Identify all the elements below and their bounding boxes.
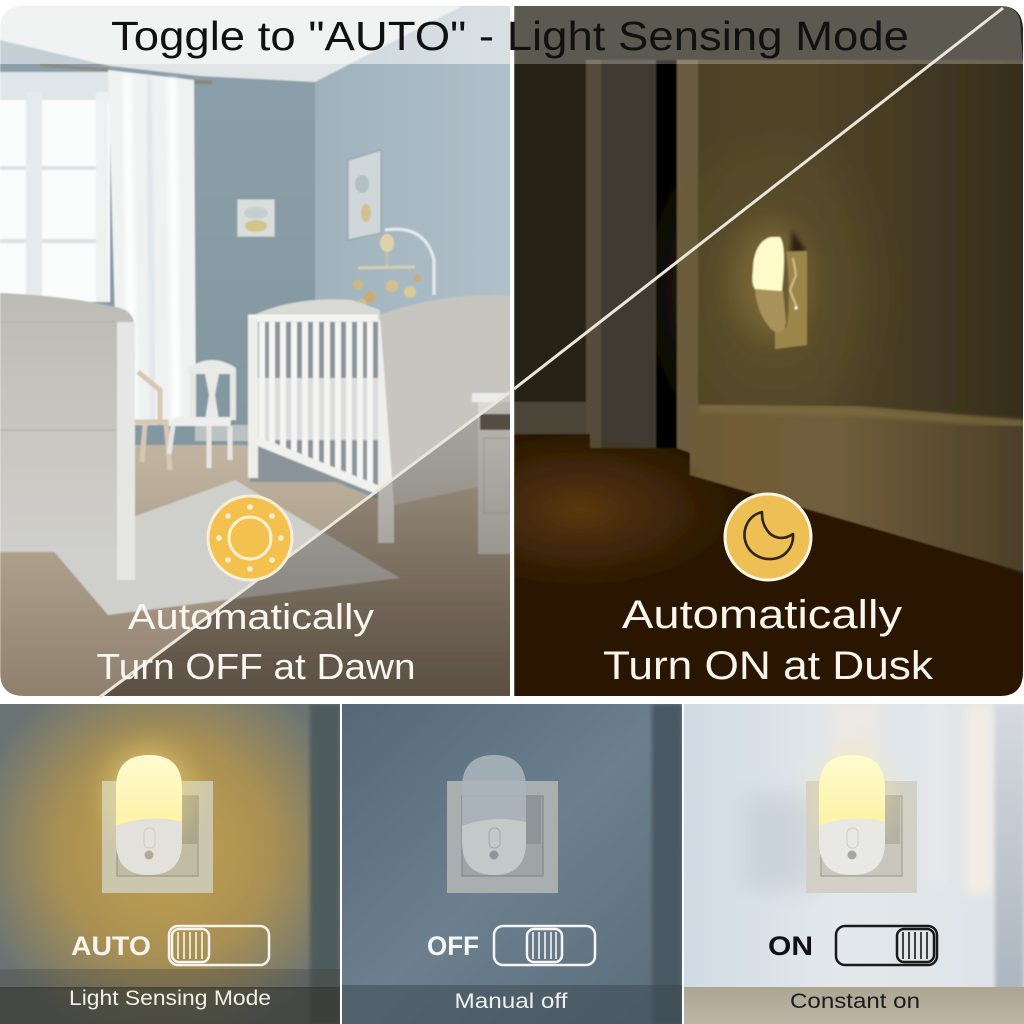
door frame — [586, 60, 699, 476]
floor glow — [514, 439, 711, 570]
floor band — [684, 987, 1024, 1024]
rocking chair — [135, 372, 170, 470]
wall glow — [657, 180, 860, 400]
night light off — [462, 755, 526, 875]
framed picture tall — [348, 150, 381, 240]
caption: on at dusk — [603, 593, 934, 688]
crib — [248, 299, 394, 543]
panel: OFF mode — [342, 704, 682, 1024]
baseboard — [690, 404, 1024, 572]
night light in profile — [732, 222, 808, 349]
divider: diagonal white line — [100, 8, 1003, 697]
nursery scene — [0, 0, 512, 700]
plate shadow — [745, 795, 815, 890]
title text: Toggle to "AUTO" - Light Sensing Mode — [111, 13, 909, 59]
baby mobile — [353, 229, 434, 309]
panel: AUTO mode — [0, 704, 340, 1024]
mode caption: Constant on — [790, 990, 920, 1013]
toggle switch left — [169, 926, 269, 965]
toggle switch right — [836, 926, 937, 965]
night light on — [811, 749, 895, 875]
curtain rod end — [190, 80, 212, 84]
ceiling — [0, 6, 462, 82]
diagonal shaded area — [100, 390, 512, 697]
curtain — [108, 70, 196, 425]
side wall shade — [310, 704, 340, 1024]
right wall — [315, 6, 512, 426]
floor — [0, 440, 512, 700]
caption: on at dusk: Turn ON at Dusk — [603, 644, 934, 688]
caption: off at dawn — [96, 596, 416, 687]
wall plate — [102, 781, 213, 893]
night light — [103, 745, 195, 875]
mode label OFF: OFF — [427, 931, 479, 961]
wall plate — [806, 781, 917, 893]
wall plate — [447, 781, 558, 893]
mode label ON: ON — [768, 931, 813, 961]
panel: day nursery, automatically off at dawn — [0, 0, 512, 700]
chair — [168, 360, 236, 468]
window — [0, 65, 110, 302]
side curtain — [995, 704, 1024, 1014]
caption: off at dawn: Turn OFF at Dawn — [96, 646, 416, 687]
caption: on at dusk: Automatically — [622, 593, 902, 637]
far skirting — [514, 402, 586, 436]
floor — [514, 434, 1024, 700]
rug — [50, 480, 400, 615]
lower band — [0, 969, 340, 1024]
side wall shade — [652, 704, 682, 1024]
hallway scene — [514, 6, 1023, 696]
lower band — [342, 985, 682, 1024]
mode caption: Manual off — [454, 990, 568, 1013]
framed picture small — [237, 199, 275, 237]
mode caption: Light Sensing Mode — [69, 987, 271, 1010]
baseboard highlight — [700, 408, 1024, 424]
window light streaks — [830, 704, 993, 894]
caption: off at dawn: Automatically — [128, 596, 374, 637]
panel: night hallway, automatically on at dusk — [514, 6, 1023, 696]
bedside cabinet — [472, 393, 512, 554]
panel: ON mode — [684, 704, 1024, 1024]
icon: sun badge — [208, 496, 292, 580]
title band — [0, 6, 1023, 64]
hallway wall — [698, 60, 1024, 420]
wall skirting — [195, 425, 255, 441]
toggle switch middle — [494, 926, 595, 965]
dresser foreground — [0, 293, 135, 580]
crib end panel — [380, 295, 510, 505]
mode label AUTO: AUTO — [71, 931, 151, 961]
icon: moon badge — [725, 494, 811, 580]
